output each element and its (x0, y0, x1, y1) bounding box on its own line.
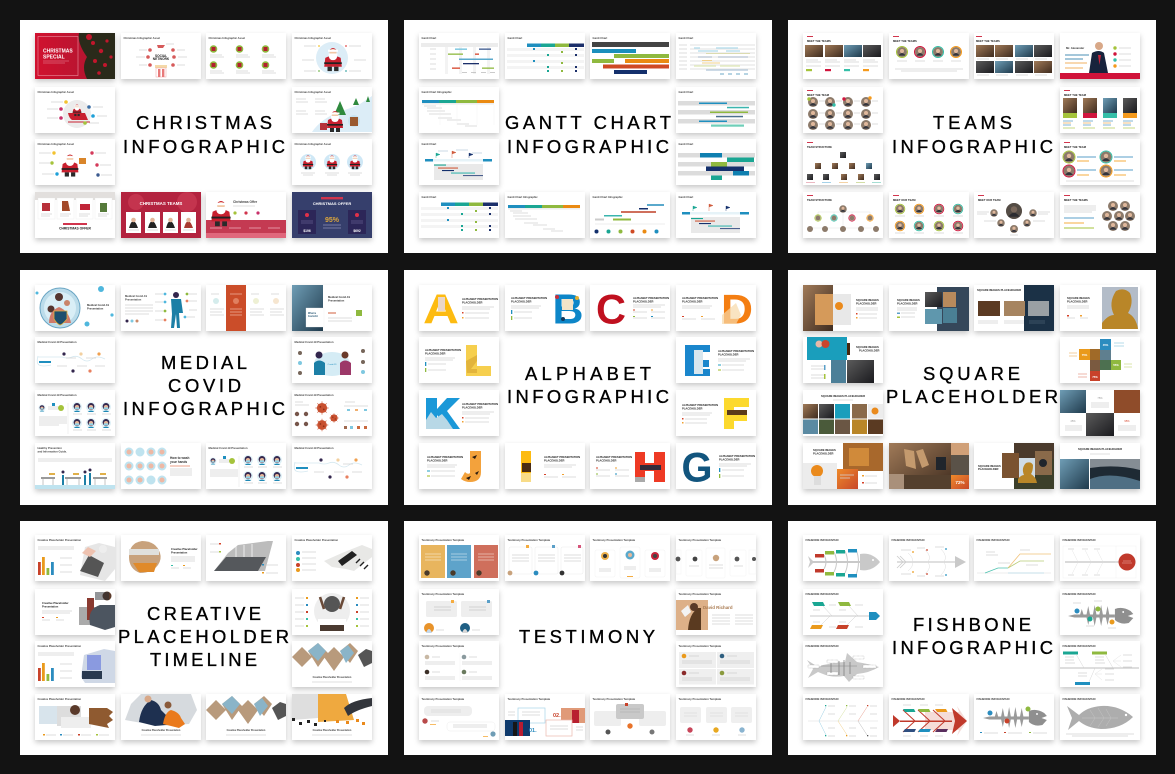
slide: letter K (419, 390, 499, 436)
slide: covid cover with globe (35, 285, 115, 331)
slide: gantt milestones: Gantt Chart (508, 36, 522, 40)
slide: square images flowers (803, 443, 883, 489)
slide: square images photo grid (803, 390, 883, 436)
slide: testimony 01 02 photos: 02. (553, 713, 561, 719)
slide: david richard: David Richard (703, 605, 733, 610)
slide: covid avatars grid repeat: Medical Covid-19 Presentation (208, 446, 248, 450)
slide: santa with tree and hills (292, 87, 372, 133)
heading: alphabet infographic (507, 363, 669, 407)
slide: gantt infographic staircase (419, 87, 499, 133)
slide: navy christmas offer: $692 (353, 229, 361, 233)
slide: square images whisky: PLACEHOLDER (856, 302, 877, 306)
panel: medial covid infographic (20, 270, 388, 505)
slide: gantt milestones repeat (419, 192, 499, 238)
panel: gantt chart infographic (404, 20, 772, 253)
slide: fishbone grey fish (1060, 694, 1140, 740)
slide: meet the teams hexagon cluster: MEET THE TEAMS (1064, 198, 1088, 202)
heading: teams infographic: TEAMS (933, 112, 1012, 133)
slide: testimony 01 02 photos: 01. (529, 728, 537, 734)
slide: covid stethoscope timeline repeat: Medical Covid-19 Presentation (294, 446, 334, 450)
slide: meet our team eight rings: MEET OUR TEAM (893, 198, 916, 202)
slide: gantt thick bars: Gantt Chart (592, 36, 607, 40)
slide: christmas teams (121, 192, 201, 238)
slide: testimony carousel: Testimony Presentation Template (678, 538, 722, 542)
slide: square images percent mosaic: 75% (1092, 375, 1098, 379)
slide: covid virus (292, 390, 372, 436)
slide: navy christmas offer: 95% (325, 217, 340, 224)
slide: fishbone red arrow (889, 694, 969, 740)
slide: testimony three bubbles with people (676, 694, 756, 740)
slide: square images blue tower: SQUARE IMAGES (897, 298, 920, 302)
slide: letter D: D (721, 286, 753, 332)
slide: fishbone framed red circle (1060, 535, 1140, 581)
heading: testimony: TESTIMONY (519, 626, 655, 647)
slide: letter C: C (596, 286, 626, 332)
slide: fishbone herringbone lines (803, 694, 883, 740)
slide: square images flowers: SQUARE IMAGES (813, 448, 836, 452)
slide: fishbone herringbone lines: FISHBONE INFOGRAPHIC (806, 697, 839, 701)
slide: covid woman doctor (121, 285, 201, 331)
slide: creative bars with office (35, 641, 115, 687)
slide: team structure circle tree: TEAM STRUCTURE (807, 198, 832, 202)
slide: creative man thinking: Creative Placeholder (42, 601, 69, 605)
slide: testimony four quotes (419, 641, 499, 687)
slide: letter B: ALPHABET PRESENTATION (511, 296, 547, 300)
slide: testimony three quote boxes: Testimony Presentation Template (508, 538, 551, 542)
panel: teams infographic (788, 20, 1156, 253)
slide: letter A (419, 285, 499, 332)
slide: gantt rows (676, 87, 756, 133)
slide: testimony four quotes: Testimony Presentation Template (422, 644, 465, 648)
slide: creative man thinking: Presentation (42, 604, 59, 608)
slide: creative paper with hand: Creative Placeholder Presentation (313, 729, 352, 732)
slide: letter K: PLACEHOLDER (462, 406, 483, 410)
slide: gantt flags timeline repeat: Gantt Chart (678, 195, 693, 199)
slide: covid cover with globe: Presentation (87, 306, 104, 310)
slide: fishbone arrow (889, 535, 969, 581)
heading: creative placeholder timeline: PLACEHOLDER (118, 626, 289, 647)
slide: gantt infographic with circles: Gantt Chart Infographic (592, 195, 623, 199)
slide: four vertical team cards (1060, 87, 1140, 133)
slide: covid healthy prevention (35, 443, 115, 489)
slide: square images flowers: PLACEHOLDER (813, 452, 834, 456)
slide: gantt thick rows (676, 139, 756, 185)
heading: creative placeholder timeline (118, 603, 289, 670)
slide: creative diamonds: Creative Placeholder Presentation (227, 729, 266, 732)
slide: christmas offer santa: Christmas Offer (233, 200, 258, 204)
slide: letter E (676, 337, 756, 383)
slide: square images checkerboard (1060, 390, 1140, 436)
slide: letter H (590, 443, 670, 489)
slide: square images full photo 72 percent (889, 443, 969, 489)
slide: testimony three bubbles with people: Testimony Presentation Template (678, 697, 722, 701)
slide: letter F: PLACEHOLDER (682, 406, 703, 410)
slide: letter L: PLACEHOLDER (425, 352, 446, 356)
slide: square images whisky: SQUARE IMAGES (856, 298, 879, 302)
slide: meet our team cluster: MEET OUR TEAM (978, 198, 1001, 202)
slide: square images golden bust: PLACEHOLDER (1067, 300, 1088, 304)
slide: covid photo with card: Covid-19 (308, 316, 318, 318)
slide: creative team brush photo (206, 535, 286, 581)
heading: square placeholder: SQUARE (923, 363, 1020, 384)
slide: gantt infographic staircase: Gantt Chart Infographic (422, 90, 452, 94)
slide: letter C (590, 285, 670, 332)
slide: meet the teams four rings: MEET THE TEAMS (893, 39, 917, 43)
slide: letter G: ALPHABET PRESENTATION (719, 454, 755, 458)
slide: fishbone coloured boxes (803, 535, 883, 581)
slide: letter D: PLACEHOLDER (682, 300, 703, 304)
slide: fishbone parallelograms: FISHBONE INFOGRAPHIC (806, 592, 839, 596)
slide: social network: Christmas Infographic Asset (124, 36, 160, 40)
slide: creative woman brush: Creative Placeholder Presentation (38, 697, 81, 701)
heading: fishbone infographic (892, 614, 1053, 658)
slide: creative diamonds (206, 694, 286, 740)
heading: square placeholder: PLACEHOLDER (886, 386, 1058, 407)
slide: square images percent mosaic: 75% (1082, 353, 1088, 357)
slide: covid photo with card: Medical Covid-19 (328, 295, 350, 299)
slide: team structure circle tree (803, 192, 883, 238)
slide: gantt flags timeline (419, 139, 499, 185)
slide: covid stethoscope timeline (35, 337, 115, 383)
heading: medial covid infographic: MEDIAL (161, 352, 247, 373)
slide: creative diamonds upper: Creative Placeholder Presentation (313, 676, 352, 679)
slide: mr alexander (1060, 33, 1140, 79)
heading: creative placeholder timeline: TIMELINE (150, 649, 257, 670)
slide: meet our team cluster (974, 192, 1054, 238)
heading: gantt chart infographic (505, 112, 671, 157)
slide: square images two wide photos: SQUARE IMAGES PLACEHOLDER (1078, 447, 1122, 451)
slide: creative round office (121, 535, 201, 581)
slide: letter J: PLACEHOLDER (427, 458, 448, 462)
slide: david richard (676, 589, 756, 635)
slide: letter E: PLACEHOLDER (718, 352, 739, 356)
slide: how to wash your hands: your hands (170, 460, 187, 464)
heading: medial covid infographic: INFOGRAPHIC (123, 398, 285, 419)
slide: three santas (292, 139, 372, 185)
heading: gantt chart infographic: GANTT CHART (505, 112, 671, 133)
heading: christmas infographic: CHRISTMAS (136, 112, 272, 133)
slide: meet the teams hexagon cluster (1060, 192, 1140, 238)
slide: square images two wide photos (1060, 443, 1140, 489)
slide: gantt milestones (505, 33, 585, 79)
slide: christmas special cover: SPECIAL (43, 54, 65, 60)
slide: letter B: PLACEHOLDER (511, 300, 532, 304)
slide: gantt flags timeline: Gantt Chart (422, 142, 436, 146)
slide: gantt light bars (676, 33, 756, 79)
heading: fishbone infographic: FISHBONE (913, 614, 1031, 635)
slide: letter G (676, 443, 756, 490)
slide: santa with tree and hills: Christmas Infographic Asset (294, 90, 331, 94)
slide: meet the team ring bars: MEET THE TEAM (1064, 145, 1087, 149)
panel: testimony (404, 521, 772, 755)
slide: testimony carousel (676, 535, 756, 581)
slide: square images percent mosaic: 45% (1103, 343, 1109, 347)
slide: covid healthy prevention: and Information Guide. (38, 450, 67, 454)
heading: medial covid infographic: COVID (168, 375, 241, 396)
slide: letter B (505, 285, 585, 332)
slide: letter D: ALPHABET PRESENTATION (682, 296, 718, 300)
slide: letter D (676, 285, 756, 332)
slide: testimony three grey bubbles (590, 694, 670, 740)
heading: teams infographic (892, 112, 1053, 157)
slide: fishbone shark (803, 641, 883, 687)
panel: alphabet infographic (404, 270, 772, 505)
slide: santa timeline: Christmas Infographic Asset (38, 142, 74, 146)
slide: creative bars with office: Creative Placeholder Presentation (38, 644, 81, 648)
slide: letter H: PLACEHOLDER (596, 458, 617, 462)
heading: fishbone infographic: INFOGRAPHIC (892, 637, 1053, 658)
slide: square images balloons: SQUARE IMAGES (856, 345, 879, 349)
slide: square images checkerboard: 95% (1124, 419, 1130, 423)
slide: how to wash your hands: How to wash (170, 456, 190, 460)
slide: creative paper with hand (292, 694, 372, 740)
slide: team structure photo tree: TEAM STRUCTURE (807, 145, 832, 149)
slide: covid stethoscope timeline repeat (292, 443, 372, 489)
slide: testimony three grey bubbles: Testimony Presentation Template (592, 697, 636, 701)
slide: meet the teams four photos: MEET THE TEAMS (807, 39, 831, 43)
slide: christmas special cover (35, 33, 115, 79)
slide: gantt light bars: Gantt Chart (678, 36, 693, 40)
slide: covid cover with globe: Medical Covid-19 (87, 303, 109, 307)
slide: square images bust and camera (974, 443, 1054, 489)
slide: square images golden bust: SQUARE IMAGES (1067, 296, 1090, 300)
heading: square placeholder (886, 363, 1058, 407)
slide: meet the team twelve circles: MEET THE TEAM (807, 93, 830, 97)
slide: meet the teams four rings (889, 33, 969, 79)
slide: covid stethoscope timeline: Medical Covid-19 Presentation (38, 340, 77, 344)
slide: fishbone grey fish: FISHBONE INFOGRAPHIC (1062, 697, 1096, 701)
heading: alphabet infographic: INFOGRAPHIC (507, 386, 669, 407)
slide: square images blue tower: PLACEHOLDER (897, 302, 918, 306)
slide: fishbone skeleton four circles (1060, 589, 1140, 635)
slide: letter F: ALPHABET PRESENTATION (682, 403, 718, 407)
slide: creative keyboard (292, 535, 372, 581)
slide: six gift icons: Christmas Infographic Asset (208, 36, 245, 40)
slide: covid two people (292, 337, 372, 383)
slide: meet the teams eight photos: MEET THE TEAMS (976, 39, 1000, 43)
slide: letter I: PLACEHOLDER (544, 458, 565, 462)
slide: fishbone framed red circle: FISHBONE INFOGRAPHIC (1062, 538, 1096, 542)
slide: fishbone branching tree: FISHBONE INFOGRAPHIC (1062, 644, 1096, 648)
slide: covid photo with card: What is (308, 312, 317, 315)
slide: four vertical team cards: MEET THE TEAM (1064, 93, 1087, 97)
panel: christmas infographic (20, 20, 388, 253)
slide: fishbone shark: FISHBONE INFOGRAPHIC (806, 644, 839, 648)
slide: creative round office: Presentation (171, 550, 188, 554)
slide: christmas special cover: CHRISTMAS (43, 48, 73, 54)
slide: social network: NETWORK (153, 57, 170, 61)
slide: gantt infographic staircase repeat (505, 192, 585, 238)
slide: square images checkerboard: 45% (1070, 419, 1076, 423)
heading: teams infographic: INFOGRAPHIC (892, 136, 1053, 157)
slide: testimony four grey cards: Testimony Presentation Template (678, 644, 722, 648)
slide: letter L (419, 337, 499, 383)
slide: square images percent mosaic (1060, 337, 1140, 383)
slide: letter A: A (423, 286, 459, 332)
slide: how to wash your hands (121, 443, 201, 489)
slide: square images bust and camera: PLACEHOLDER (978, 467, 999, 471)
slide: covid avatars grid (35, 390, 115, 436)
slide: square images balloons: PLACEHOLDER (859, 348, 880, 352)
slide: testimony speech bubbles: Testimony Presentation Template (422, 592, 465, 596)
slide: gantt flags timeline repeat (676, 192, 756, 238)
slide: testimony three quote boxes (505, 535, 585, 581)
slide: mr alexander: Mr. Alexander (1066, 46, 1085, 50)
slide: social network: SOCIAL (155, 54, 167, 58)
panel: square placeholder (788, 270, 1156, 505)
heading: christmas infographic (123, 112, 285, 157)
slide: testimony three portraits: Testimony Presentation Template (592, 538, 636, 542)
slide: creative bars with laptop (35, 535, 115, 581)
slide: navy christmas offer: CHRISTMAS OFFER (313, 201, 351, 206)
slide: christmas offer cards: CHRISTMAS OFFER (59, 226, 91, 230)
slide: letter G: G (682, 444, 712, 490)
slide: fishbone timeline lines (974, 535, 1054, 581)
heading: medial covid infographic (123, 352, 285, 419)
slide: letter F (676, 390, 756, 436)
slide: three santas: Christmas Infographic Asset (294, 142, 331, 146)
slide: letter H: ALPHABET PRESENTATION (596, 455, 632, 459)
slide: fishbone skeleton three circles: FISHBONE INFOGRAPHIC (976, 697, 1010, 701)
slide: square images three photos: SQUARE IMAGES PLACEHOLDER (977, 288, 1021, 292)
slide: letter A: PLACEHOLDER (462, 300, 483, 304)
slide: social network (121, 33, 201, 79)
slide: gantt rows: Gantt Chart (678, 90, 693, 94)
slide: creative hands on clock (292, 589, 372, 635)
slide: santa timeline (35, 139, 115, 185)
slide: testimony 01 02 photos: Testimony Presentation Template (508, 697, 551, 701)
slide: gantt infographic with circles (590, 192, 670, 238)
slide: letter K: ALPHABET PRESENTATION (462, 402, 498, 406)
slide: square images balloons (803, 337, 883, 383)
slide: meet the teams four photos (803, 33, 883, 79)
slide: covid woman doctor: Presentation (125, 298, 142, 302)
slide: covid four columns (206, 285, 286, 331)
slide: letter L: ALPHABET PRESENTATION (425, 348, 461, 352)
slide: creative bars with laptop: Creative Placeholder Presentation (38, 538, 81, 542)
slide: creative keyboard: Creative Placeholder Presentation (294, 538, 338, 542)
slide: covid avatars grid: Medical Covid-19 Presentation (38, 393, 77, 397)
slide: gantt with months (419, 33, 499, 79)
heading: gantt chart infographic: INFOGRAPHIC (507, 136, 669, 157)
slide: fishbone red arrow: FISHBONE INFOGRAPHIC (892, 697, 925, 701)
slide: testimony three portraits (590, 535, 670, 581)
heading: creative placeholder timeline: CREATIVE (147, 603, 261, 624)
slide: letter I (505, 443, 585, 489)
slide: letter E: ALPHABET PRESENTATION (718, 349, 754, 353)
slide: creative woman brush (35, 694, 115, 740)
slide: square images checkerboard: 75% (1097, 396, 1103, 400)
slide: gantt infographic staircase repeat: Gantt Chart Infographic (508, 195, 538, 199)
slide: letter G: PLACEHOLDER (719, 458, 740, 462)
slide: david richard: Testimony Presentation Template (678, 592, 722, 596)
slide: fishbone coloured boxes: FISHBONE INFOGRAPHIC (806, 538, 839, 542)
slide: square images percent mosaic: 55% (1113, 363, 1119, 367)
slide: covid two people: Medical Covid-19 Presentation (294, 340, 334, 344)
slide: covid photo with card: Presentation (328, 298, 345, 302)
slide: testimony three colour cards (419, 535, 499, 581)
heading: christmas infographic: INFOGRAPHIC (123, 136, 285, 157)
slide: testimony conversation: Testimony Presentation Template (422, 697, 465, 701)
slide: meet the teams eight photos (974, 33, 1054, 79)
slide: meet the team ring bars (1060, 139, 1140, 185)
heading: alphabet infographic: ALPHABET (525, 363, 651, 384)
slide: letter C: ALPHABET PRESENTATION (633, 296, 669, 300)
slide: fishbone arrow: FISHBONE INFOGRAPHIC (892, 538, 925, 542)
slide: square images blue tower (889, 285, 969, 331)
slide: covid healthy prevention: Healthy Prevention (38, 446, 62, 450)
slide: gantt with months: Gantt Chart (422, 36, 436, 40)
slide: christmas offer santa (206, 192, 286, 238)
slide: creative round office: Creative Placeholder (171, 547, 198, 551)
slide: testimony 01 02 photos (505, 694, 585, 740)
panel: fishbone infographic (788, 521, 1156, 755)
slide: fishbone timeline lines: FISHBONE INFOGRAPHIC (976, 538, 1010, 542)
slide: fishbone skeleton four circles: FISHBONE INFOGRAPHIC (1062, 592, 1096, 596)
slide: covid avatars grid repeat (206, 443, 286, 489)
slide: six gift icons (206, 33, 286, 79)
slide: square images three photos (974, 285, 1054, 331)
slide: christmas teams: CHRISTMAS TEAMS (140, 201, 182, 206)
slide: gantt milestones repeat: Gantt Chart (422, 195, 436, 199)
slide: letter J: ALPHABET PRESENTATION (427, 455, 463, 459)
slide: fishbone skeleton three circles (974, 694, 1054, 740)
slide: navy christmas offer: $196 (303, 229, 311, 233)
slide: square images full photo 72 percent: 72% (955, 480, 965, 485)
slide: covid woman doctor: Medical Covid-19 (125, 294, 147, 298)
slide: letter B: B (552, 286, 584, 332)
slide: testimony three colour cards: Testimony Presentation Template (422, 538, 465, 542)
slide: meet our team eight rings (889, 192, 969, 238)
slide: letter I: ALPHABET PRESENTATION (544, 455, 580, 459)
slide: meet the team twelve circles (803, 87, 883, 133)
slide: santa sleigh (35, 87, 115, 133)
slide: testimony speech bubbles (419, 589, 499, 635)
slide: testimony conversation (419, 694, 499, 740)
slide: creative diamonds upper (292, 641, 372, 687)
slide: square images photo grid: SQUARE IMAGES PLACEHOLDER (821, 394, 865, 398)
slide: navy christmas offer (292, 192, 372, 238)
slide: creative handshake brush (121, 694, 201, 740)
slide: letter J (419, 443, 499, 489)
slide: covid virus: Medical Covid-19 Presentation (294, 393, 334, 397)
panel: creative placeholder timeline (20, 521, 388, 755)
slide: fishbone parallelograms (803, 589, 883, 635)
slide: letter A: ALPHABET PRESENTATION (462, 297, 498, 301)
slide: creative handshake brush: Creative Placeholder Presentation (142, 729, 181, 732)
slide: square images whisky (803, 285, 883, 331)
slide: fishbone branching tree (1060, 641, 1140, 687)
slide: santa sleigh: Christmas Infographic Asset (38, 90, 74, 94)
slide: christmas offer cards (35, 192, 115, 238)
slide: square images bust and camera: SQUARE IMAGES (978, 464, 1001, 468)
slide: covid two people: Covid-19 (328, 364, 337, 366)
slide: creative man thinking (35, 589, 115, 635)
slide: team structure photo tree (803, 139, 883, 185)
slide: covid photo with card (292, 285, 372, 331)
slide: gantt thick rows: Gantt Chart (678, 142, 693, 146)
slide: santa in blue circle: Christmas Infographic Asset (294, 36, 331, 40)
slide: square images golden bust (1060, 285, 1140, 331)
slide: letter C: PLACEHOLDER (633, 300, 654, 304)
slide: testimony four grey cards (676, 641, 756, 687)
slide: santa in blue circle (292, 33, 372, 79)
slide: gantt thick bars (590, 33, 670, 79)
